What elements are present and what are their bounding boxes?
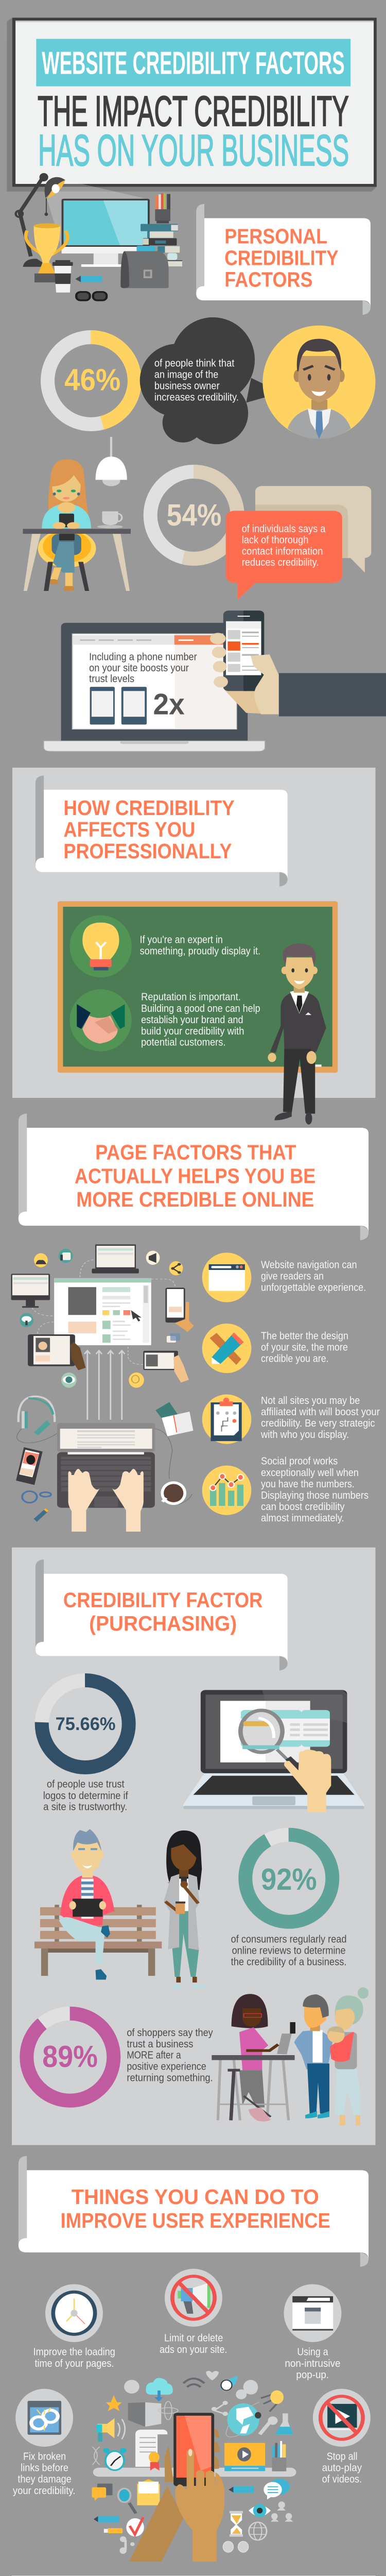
banner: things you can do — [19, 2156, 369, 2267]
donut: 89 percent: 89% — [42, 2040, 98, 2074]
text: broken links: Fix broken — [23, 2450, 66, 2462]
section: personal credibility stats — [23, 317, 375, 600]
text: broken links — [13, 2450, 75, 2496]
illustration: headphones — [17, 1396, 57, 1443]
title frame — [7, 18, 377, 192]
speech cloud — [140, 317, 282, 444]
icon: handshake — [69, 989, 132, 1052]
text: non-intrusive popup: pop-up. — [296, 2369, 329, 2380]
text: 46 percent caption: increases credibility. — [154, 391, 239, 403]
panel: credibility factor purchasing — [12, 1548, 376, 2145]
text: reputation: Reputation is important. — [141, 991, 241, 1003]
panel: how credibility affects you — [12, 768, 376, 1098]
text: page factors list: Social proof works — [261, 1455, 338, 1467]
text: 46 percent caption — [154, 358, 239, 403]
text: 92 percent caption — [231, 1934, 346, 1968]
donut: 89 percent — [27, 2013, 114, 2100]
donut: 54 percent: 54% — [167, 498, 221, 532]
section: user experience icons — [13, 2385, 371, 2576]
callout: chat bubbles: contact information — [242, 545, 323, 557]
coffee and accessories — [22, 1481, 186, 1522]
text: page factors list: The better the design — [261, 1330, 348, 1342]
donut: 92 percent — [245, 1835, 332, 1922]
text: page factors list: credible you are. — [261, 1352, 329, 1364]
illustration: coffee cup — [52, 260, 73, 293]
illustration: cluster of icons around a phone — [92, 2391, 296, 2554]
text: phone number boost: on your site boosts your — [89, 662, 189, 673]
banner: personal credibility factors: FACTORS — [224, 267, 312, 291]
text: stop autoplay: auto-play — [322, 2462, 362, 2473]
illustration: bag — [120, 251, 169, 288]
text: loading time: Improve the loading — [33, 2346, 115, 2358]
text: page factors list: of your site, the more — [261, 1341, 348, 1353]
donut: 46 percent — [47, 337, 135, 425]
illustration: laptop with magnifier — [183, 1690, 364, 1812]
icon: no ads — [165, 2269, 222, 2327]
text: trust logos caption: of people use trust — [47, 1778, 125, 1790]
text: reputation — [141, 991, 260, 1048]
text: trust logos caption: a site is trustworthy. — [43, 1801, 127, 1812]
notebook — [155, 1402, 193, 1436]
text: 46 percent caption: business owner — [154, 380, 220, 392]
section: page factors — [11, 1244, 194, 1508]
text: page factors list: almost immediately. — [261, 1512, 344, 1523]
icon: light bulb — [69, 916, 132, 977]
illustration: desk lamp — [16, 173, 148, 267]
text: non-intrusive popup: non-intrusive — [285, 2358, 341, 2369]
text: limit ads — [160, 2332, 227, 2355]
donut: 54 percent — [150, 472, 237, 558]
icon: two phones — [90, 687, 147, 724]
icons: small social circles — [20, 1249, 183, 1388]
text: 89 percent caption: of shoppers say they — [127, 2027, 213, 2038]
text: 46 percent caption: of people think that — [154, 358, 235, 369]
banner: credibility factor purchasing: CREDIBILITY FACTOR — [63, 1588, 262, 1612]
icon: no autoplay — [313, 2389, 371, 2447]
chalkboard — [58, 901, 338, 1073]
panel: blogger factors — [12, 2575, 376, 2576]
text: 89 percent caption: positive experience — [127, 2060, 206, 2072]
decorative dashes — [32, 1260, 176, 1365]
banner: credibility factor purchasing: (PURCHASING) — [89, 1612, 237, 1635]
banner: personal credibility factors: PERSONAL — [224, 225, 327, 248]
illustration: woman with phone — [164, 1831, 206, 1990]
section: chalkboard and page factors banner — [19, 901, 369, 1240]
portrait: businessman — [262, 326, 375, 439]
donut: 75.66 percent — [42, 1681, 129, 1767]
callout: chat bubbles — [226, 486, 371, 600]
illustration: hanging lamp — [96, 437, 127, 486]
illustration: hands and phone — [129, 2413, 224, 2562]
text: limit ads: Limit or delete — [164, 2332, 223, 2344]
icon: clock — [45, 2284, 103, 2342]
arrows up — [84, 1350, 125, 1420]
text: phone number boost: Including a phone number — [89, 651, 197, 663]
text: non-intrusive popup: Using a — [297, 2346, 328, 2358]
text: non-intrusive popup — [285, 2346, 341, 2380]
text: expert — [140, 934, 260, 957]
banner: how credibility affects you professionally: PROFESSIONALLY — [63, 839, 232, 863]
icons: yellow feature circles — [202, 1252, 251, 1515]
text: expert: something, proudly display it. — [140, 945, 260, 957]
section: page factors continuation — [16, 1252, 380, 1812]
text: reputation: build your credibility with — [141, 1025, 244, 1037]
text: phone number boost: trust levels — [89, 673, 134, 685]
text: 89 percent caption: MORE after a — [127, 2049, 181, 2061]
icon: popup window — [284, 2284, 341, 2342]
banner: how credibility affects you professionally: HOW CREDIBILITY — [63, 796, 235, 820]
text: stop autoplay: of videos. — [322, 2473, 362, 2485]
text: 89 percent caption: trust a business — [127, 2038, 193, 2049]
banner: credibility factor purchasing — [36, 1560, 288, 1671]
illustration: woman with tablet at table — [23, 459, 131, 591]
text: reputation: establish your brand and — [141, 1014, 243, 1025]
illustration: central web page — [54, 1278, 151, 1345]
text: page factors list: can boost credibility — [261, 1501, 345, 1512]
illustration: laptop with hands — [57, 1423, 192, 1508]
section: things you can do — [19, 2156, 369, 2395]
text: stop autoplay — [322, 2450, 362, 2485]
text: reputation: potential customers. — [141, 1036, 226, 1048]
illustration: pencil cup and books — [136, 193, 182, 266]
text: page factors list: give readers an — [261, 1270, 324, 1282]
illustration: connected devices — [11, 1244, 194, 1383]
hands on keyboard — [68, 1469, 144, 1532]
callout: chat bubbles: lack of thorough — [242, 534, 308, 546]
section: laptop and banner — [36, 611, 386, 887]
text: broken links: your credibility. — [13, 2485, 75, 2496]
text: broken links: links before — [21, 2462, 68, 2473]
text: stop autoplay: Stop all — [327, 2450, 358, 2462]
banner: page factors — [19, 1113, 369, 1240]
text: page factors list: with who you display. — [260, 1429, 349, 1440]
illustration: trophy — [26, 224, 67, 282]
icons: top of cluster — [124, 2371, 258, 2395]
text: loading time — [33, 2346, 115, 2369]
donut: 46 percent: 46% — [64, 363, 120, 397]
text: reputation: Building a good one can help — [141, 1003, 260, 1014]
section: purchasing people — [34, 1829, 369, 2125]
text: trust logos caption — [43, 1778, 128, 1812]
callout: chat bubbles: reduces credibility. — [242, 556, 319, 568]
donut: 92 percent: 92% — [261, 1862, 317, 1896]
icon: broken link — [15, 2389, 73, 2447]
illustration: pen — [75, 276, 102, 282]
text: loading time: time of your pages. — [34, 2358, 114, 2369]
text: 46 percent caption: an image of the — [154, 368, 218, 380]
text: limit ads: ads on your site. — [160, 2344, 227, 2355]
callout: chat bubbles: of individuals says a — [242, 523, 325, 534]
section: header and desk — [7, 18, 377, 315]
illustration: laptop — [44, 623, 265, 751]
text: phone number boost — [89, 651, 197, 685]
illustration: monitor — [62, 199, 150, 267]
title band — [36, 39, 350, 87]
banner: how credibility affects you professionally: AFFECTS YOU — [63, 818, 195, 841]
banner: how credibility affects you professionally — [36, 775, 288, 887]
text: trust logos caption: logos to determine if — [43, 1790, 128, 1801]
banner: personal credibility factors — [196, 204, 371, 315]
text: expert: If you're an expert in — [140, 934, 223, 945]
illustration: shoppers group — [212, 1987, 369, 2125]
illustration: presenter — [268, 943, 326, 1125]
illustration: glasses — [76, 292, 107, 300]
text: 89 percent caption — [127, 2027, 213, 2083]
illustration: right icons — [212, 2385, 293, 2552]
illustration: man on bench — [34, 1829, 162, 1980]
text: broken links: they damage — [17, 2473, 72, 2485]
text: 89 percent caption: returning something. — [127, 2072, 213, 2083]
illustration: phone with portrait — [16, 1447, 43, 1485]
text: page factors list — [260, 1259, 380, 1523]
donut: 75.66 percent: 75.66% — [56, 1714, 116, 1734]
stat: 2x: 2x — [153, 688, 185, 721]
banner: page factors: PAGE FACTORS THAT — [95, 1140, 296, 1164]
illustration: hand holding phone — [210, 611, 386, 716]
